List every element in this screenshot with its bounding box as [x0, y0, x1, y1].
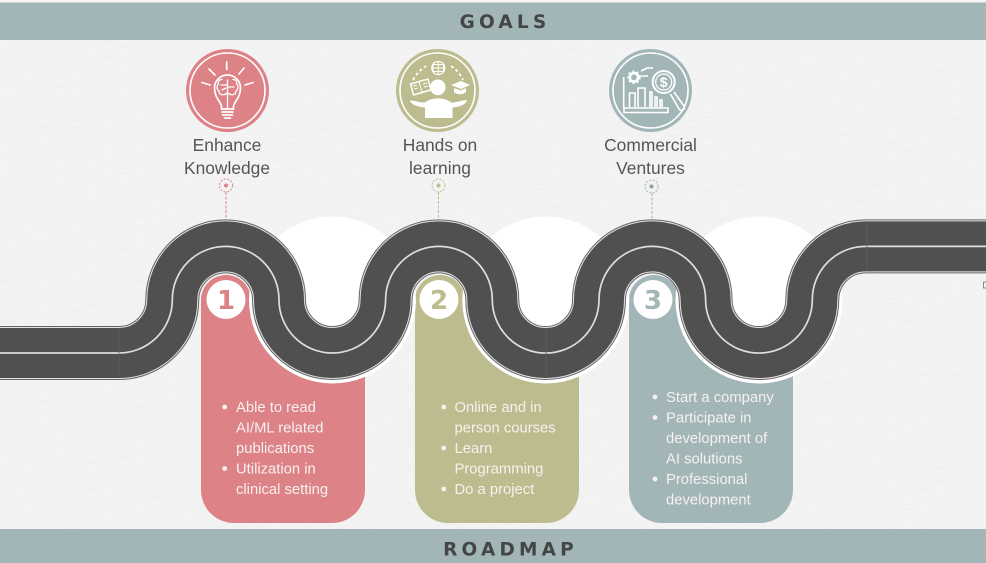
- connector marker 1: [220, 179, 232, 219]
- number badge 3: 3: [644, 286, 662, 316]
- goal label: enhance knowledge: [184, 135, 270, 178]
- bullet list 2: [441, 400, 556, 498]
- goal label: commercial ventures: Commercial: [604, 135, 697, 155]
- goal label: hands on learning: Hands on: [403, 135, 477, 155]
- bullet list 1: publications: [236, 441, 314, 457]
- icon: light bulb with brain: [186, 49, 269, 132]
- connector marker 3: [645, 180, 658, 219]
- bullet list 3: Start a company: [666, 390, 774, 406]
- icon: person juggling learning symbols: [396, 49, 479, 132]
- panel: step 1 card background: [201, 275, 365, 523]
- bullet list 2: Do a project: [454, 482, 534, 498]
- header bar: goals: GOALS: [460, 12, 550, 33]
- small edge mark at right: [984, 282, 986, 288]
- bullet list 1: Able to read: [236, 400, 316, 416]
- goal label: hands on learning: [403, 135, 477, 178]
- step 1 content: [206, 280, 328, 498]
- goal label: enhance knowledge: Enhance: [193, 135, 261, 155]
- icon: chart and magnifier with dollar: [609, 49, 692, 132]
- bullet list 3: Participate in: [666, 410, 752, 426]
- goal label: hands on learning: learning: [409, 158, 471, 178]
- bullet list 3: development of: [666, 431, 768, 447]
- step 3 content: [634, 280, 774, 508]
- bullet list 2: Learn: [454, 441, 492, 457]
- number badge 2: 2: [430, 286, 448, 316]
- bullet list 1: AI/ML related: [236, 420, 323, 436]
- number badge 2: [420, 280, 458, 319]
- goal label: commercial ventures: [604, 135, 697, 178]
- header bar: goals: [0, 2, 986, 40]
- panel: step 3 card background: [629, 275, 793, 523]
- goal label: enhance knowledge: Knowledge: [184, 158, 270, 178]
- bullet list 2: person courses: [454, 420, 556, 436]
- number badge 1: [206, 280, 246, 319]
- icon: chart and magnifier with dollar: $: [660, 74, 668, 90]
- number badge 3: [634, 280, 672, 319]
- bullet list 2: Online and in: [454, 400, 542, 416]
- winding road: [0, 222, 986, 378]
- bullet list 3: [653, 390, 774, 508]
- bullet list 2: Programming: [454, 462, 543, 478]
- white backdrop circles behind road valleys: [249, 216, 842, 384]
- connector marker 2: [432, 179, 445, 219]
- number badge 1: 1: [217, 286, 235, 316]
- footer bar: roadmap: [0, 529, 986, 563]
- panel: step 2 card background: [415, 275, 579, 523]
- step 2 content: [420, 280, 556, 498]
- footer bar: roadmap: ROADMAP: [443, 540, 578, 560]
- bullet list 1: clinical setting: [236, 482, 328, 498]
- goal label: commercial ventures: Ventures: [616, 158, 685, 178]
- bullet list 1: [222, 400, 328, 498]
- bullet list 1: Utilization in: [236, 462, 316, 478]
- bullet list 3: development: [666, 492, 751, 508]
- bullet list 3: Professional: [666, 472, 747, 488]
- bullet list 3: AI solutions: [666, 452, 742, 468]
